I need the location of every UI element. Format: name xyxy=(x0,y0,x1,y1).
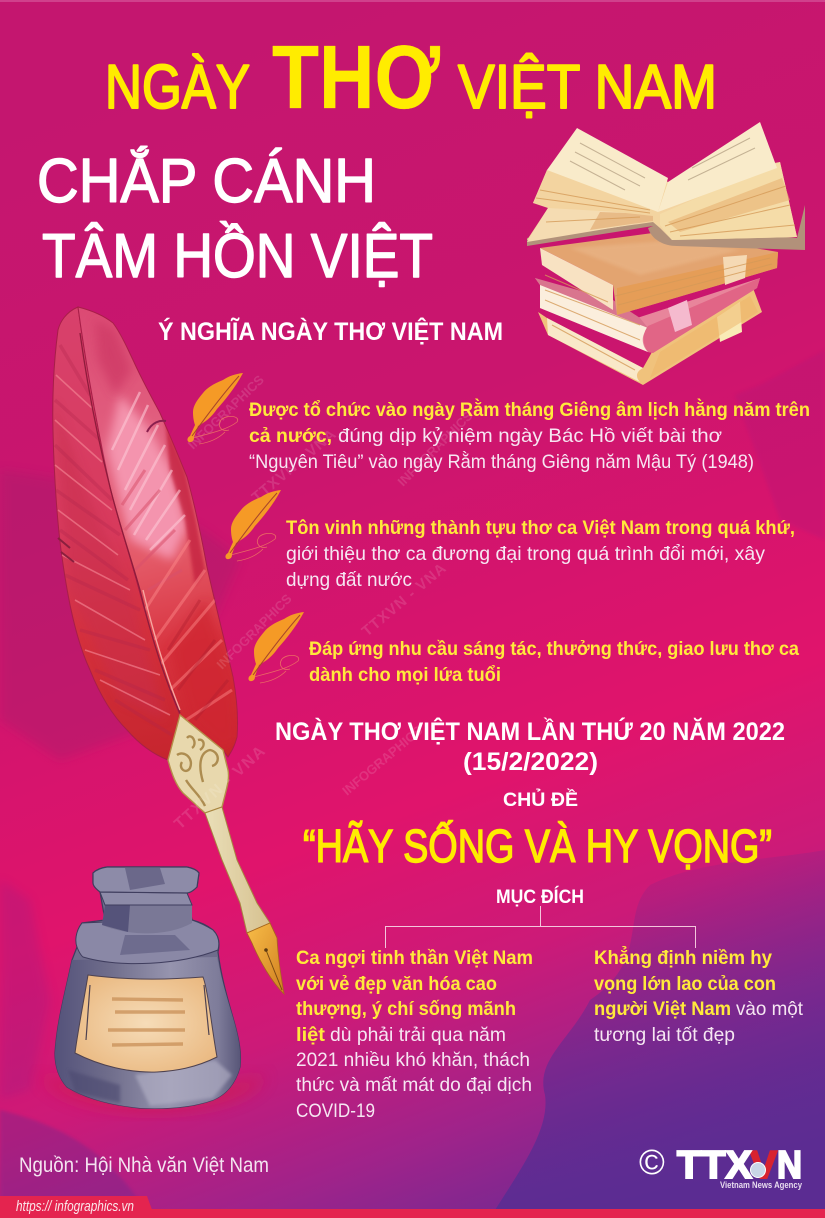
item 2: feather icon and text xyxy=(225,490,795,591)
item 1: feather icon and text: “Nguyên Tiêu” vào ngày Rằm tháng Giêng năm Mậu Tý (1948) xyxy=(249,450,754,473)
label: mục đích: MỤC ĐÍCH xyxy=(496,886,584,908)
purpose text: right: tương lai tốt đẹp xyxy=(594,1024,735,1046)
purpose text: left: 2021 nhiều khó khăn, thách xyxy=(296,1049,530,1071)
purpose text: right: Khẳng định niềm hy xyxy=(594,945,772,969)
item 1: feather icon and text: cả nước, xyxy=(249,425,332,447)
item 3: feather icon and text xyxy=(248,612,799,686)
section heading: Ý nghĩa: Ý NGHĨA NGÀY THƠ VIỆT NAM xyxy=(158,316,503,346)
purpose text: right: người Việt Nam xyxy=(594,998,731,1020)
title: Ngày Thơ Việt Nam: THƠ xyxy=(272,28,440,128)
purpose text: left: thượng, ý chí sống mãnh xyxy=(296,998,516,1020)
watermarks: TTXVN - VNA xyxy=(171,742,270,833)
open book right pages xyxy=(660,162,797,240)
pen nib xyxy=(247,923,284,994)
item 3: feather icon and text: dành cho mọi lứa tuổi xyxy=(309,664,501,686)
purpose text: left: liệt xyxy=(296,1024,326,1046)
connector lines xyxy=(386,906,696,948)
logo: TTXVN: N xyxy=(777,1144,802,1187)
pen stem xyxy=(205,807,270,933)
logo: TTXVN: Vietnam News Agency xyxy=(720,1180,803,1191)
watermarks: INFOGRAPHICS xyxy=(339,723,426,798)
item 1: feather icon and text xyxy=(187,373,810,473)
label: chủ đề: CHỦ ĐỀ xyxy=(503,789,578,811)
pink book xyxy=(535,278,760,353)
pen ferrule xyxy=(168,715,229,813)
watermarks: INFOGRAPHICS xyxy=(185,372,267,452)
illustration: ink bottle xyxy=(55,867,240,1108)
item 1: feather icon and text: đúng dịp kỷ niệm ngày Bác Hồ viết bài thơ xyxy=(338,425,722,447)
open book cover xyxy=(527,205,805,250)
footer bar with url xyxy=(0,1196,825,1218)
logo: TTXVN: TTX xyxy=(677,1144,752,1187)
watermarks xyxy=(171,372,476,833)
title: Ngày Thơ Việt Nam xyxy=(105,28,717,128)
item 2: feather icon and text: dựng đất nước xyxy=(286,569,412,591)
purpose text: left: Ca ngợi tinh thần Việt Nam xyxy=(296,947,533,969)
subtitle: Chắp cánh tâm hồn Việt xyxy=(37,147,433,291)
subtitle: Chắp cánh tâm hồn Việt: TÂM HỒN VIỆT xyxy=(42,222,433,291)
logo: TTXVN: V xyxy=(750,1144,777,1187)
purpose text: right xyxy=(594,945,804,1046)
page text lines xyxy=(570,138,755,190)
orange book xyxy=(540,232,778,315)
title: Ngày Thơ Việt Nam: NGÀY xyxy=(105,53,250,122)
illustration: red quill feather xyxy=(53,307,284,994)
bottle label xyxy=(75,975,217,1072)
title: Ngày Thơ Việt Nam: VIỆT NAM xyxy=(458,53,717,122)
bottom yellow book xyxy=(538,288,762,385)
heading: lần thứ 20: (15/2/2022) xyxy=(463,748,598,776)
logo: TTXVN: © xyxy=(639,1143,665,1182)
footer bar with url: https:// infographics.vn xyxy=(16,1198,134,1215)
item 2: feather icon and text: giới thiệu thơ ca đương đại trong quá trình đổi mới, xây xyxy=(286,543,765,565)
watermarks: INFOGRAPHICS xyxy=(395,408,476,489)
item 2: feather icon and text: Tôn vinh những thành tựu thơ ca Việt Nam trong quá khứ, xyxy=(286,517,795,539)
purpose text: left: với vẻ đẹp văn hóa cao xyxy=(296,973,497,995)
purpose text: right: vọng lớn lao của con xyxy=(594,973,776,995)
heading: lần thứ 20: NGÀY THƠ VIỆT NAM LẦN THỨ 20 NĂM 2022 xyxy=(275,716,785,746)
purpose text: left: COVID-19 xyxy=(296,1100,375,1122)
watermarks: INFOGRAPHICS xyxy=(214,591,295,672)
logo: TTXVN xyxy=(639,1143,803,1191)
open book left pages xyxy=(533,170,660,216)
watermarks: TTXVN - VNA xyxy=(249,425,340,506)
purpose text: right: vào một xyxy=(736,998,804,1020)
heading: lần thứ 20 xyxy=(275,716,785,776)
purpose text: left: dù phải trải qua năm xyxy=(330,1024,506,1046)
illustration: stack of books xyxy=(527,122,805,385)
source: Nguồn: Hội Nhà văn Việt Nam xyxy=(19,1154,269,1177)
item 3: feather icon and text: Đáp ứng nhu cầu sáng tác, thưởng thức, giao lưu thơ ca xyxy=(309,638,799,660)
purpose text: left: thức và mất mát do đại dịch xyxy=(296,1074,532,1096)
subtitle: Chắp cánh tâm hồn Việt: CHẮP CÁNH xyxy=(37,147,376,216)
open book lower left flap xyxy=(527,208,653,242)
watermarks: TTXVN - VNA xyxy=(359,559,450,640)
open book backing xyxy=(527,150,797,240)
purpose text: left xyxy=(296,947,533,1122)
